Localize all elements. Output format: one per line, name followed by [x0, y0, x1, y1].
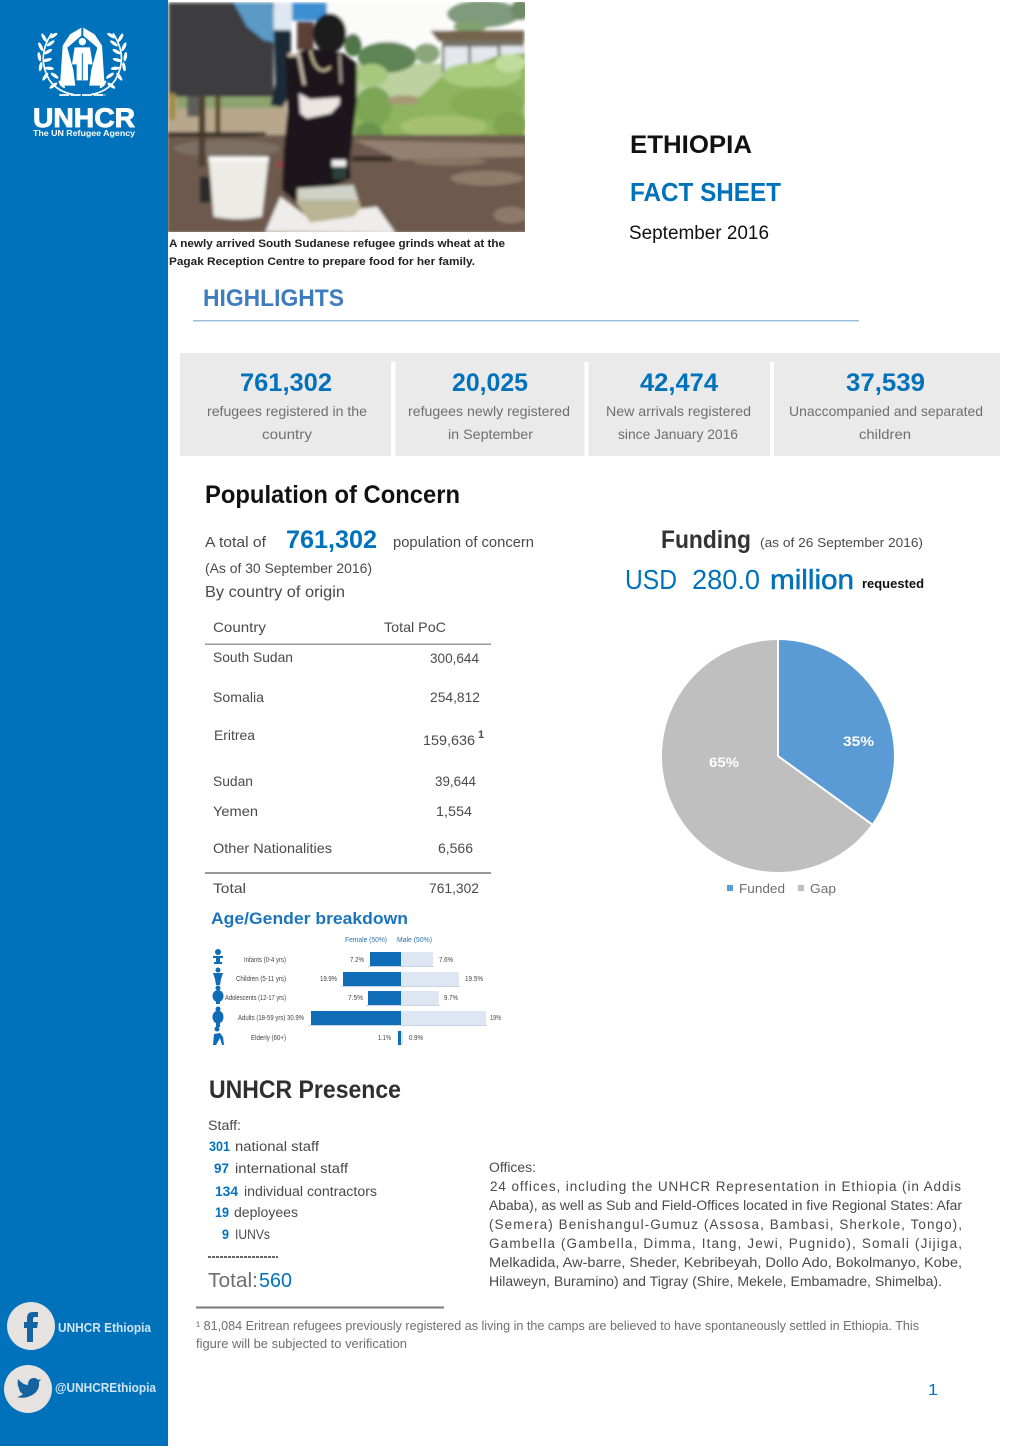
panel: highlight figures: [180, 353, 1000, 456]
text block: population total: 761,302: [286, 526, 377, 554]
pie chart: funded vs gap: 65%: [709, 754, 740, 770]
table: population by country of origin: Sudan: [213, 773, 253, 789]
icon: UNHCR logo: [33, 28, 136, 138]
text: funding requested: [625, 564, 924, 595]
text block: staff: Staff:: [208, 1118, 241, 1133]
text: facebook handle: UNHCR Ethiopia: [58, 1321, 152, 1335]
text: funding requested: requested: [862, 576, 924, 591]
panel: highlight figures: since January 2016: [618, 426, 738, 442]
chart legend: Funded: [739, 881, 785, 896]
panel: highlight figures: refugees registered in the: [207, 403, 367, 419]
table: population by country of origin: Yemen: [213, 803, 258, 819]
chart: age and gender bars: Male (50%): [397, 937, 432, 944]
chart: age and gender bars: 7.6%: [439, 957, 453, 964]
text block: staff: 9: [222, 1227, 229, 1242]
chart: age and gender bars: [212, 937, 501, 1045]
chart: age and gender bars: 19%: [490, 1015, 501, 1022]
text block: offices: Ababa), as well as Sub and Field-Offices located in five Regional States: Afar: [489, 1198, 963, 1213]
text block: staff: 560: [259, 1270, 292, 1292]
table: population by country of origin: Total PoC: [384, 619, 446, 635]
text block: staff: [208, 1118, 377, 1292]
panel: blue sidebar: [0, 0, 168, 1446]
text block: staff: deployees: [234, 1205, 298, 1220]
title block: September 2016: [629, 223, 769, 244]
panel: highlight figures: children: [859, 426, 911, 442]
panel: highlight figures: Unaccompanied and separated: [789, 403, 983, 419]
title block: [629, 131, 781, 244]
chart: age and gender bars: 7.2%: [350, 957, 364, 964]
text block: staff: international staff: [235, 1161, 348, 1176]
heading: age/gender breakdown: Age/Gender breakdown: [211, 909, 408, 928]
table: population by country of origin: 254,812: [430, 689, 480, 705]
table: population by country of origin: Eritrea: [214, 727, 255, 743]
chart: age and gender bars: Infants (0-4 yrs): [244, 957, 286, 964]
panel: highlight figures: in September: [448, 426, 533, 442]
text block: staff: 19: [215, 1205, 229, 1220]
text block: offices: [489, 1160, 963, 1289]
text block: staff: IUNVs: [235, 1227, 270, 1242]
text: twitter handle: @UNHCREthiopia: [55, 1381, 157, 1395]
chart: age and gender bars: Elderly (60+): [251, 1035, 286, 1042]
chart: age and gender bars: 7.5%: [348, 995, 363, 1002]
heading: funding: (as of 26 September 2016): [760, 536, 923, 550]
panel: highlight figures: 761,302: [240, 369, 332, 397]
pie chart: funded vs gap: 35%: [843, 733, 875, 749]
chart: age and gender bars: Adults (18-59 yrs) 30.9%: [238, 1015, 304, 1022]
footnote: figure will be subjected to verification: [196, 1337, 407, 1351]
chart: age and gender bars: 1.1%: [378, 1035, 391, 1042]
heading: UNHCR presence: UNHCR Presence: [209, 1076, 401, 1104]
text block: offices: Melkadida, Aw-barre, Sheder, Kebribeyah, Dollo Ado, Bokolmanyo, Kobe,: [489, 1255, 962, 1270]
table: population by country of origin: 1,554: [436, 803, 472, 819]
table: population by country of origin: Other Nationalities: [213, 840, 332, 856]
text block: offices: Hilaweyn, Buramino) and Tigray (Shire, Mekele, Embamadre, Shimelba).: [489, 1274, 942, 1289]
heading: funding: [661, 526, 923, 554]
chart: age and gender bars: 9.7%: [444, 995, 458, 1002]
icon: UNHCR logo: The UN Refugee Agency: [33, 129, 136, 138]
chart: age and gender bars: Adolescents (12-17 yrs): [225, 995, 286, 1002]
footnote: [196, 1306, 919, 1351]
chart: age and gender bars: Female (50%): [345, 937, 387, 944]
photo caption: [169, 238, 505, 268]
text block: offices: (Semera) Benishangul-Gumuz (Assosa, Bambasi, Sherkole, Tongo),: [489, 1217, 962, 1232]
text block: staff: Total:: [208, 1270, 258, 1292]
table: population by country of origin: 159,636: [423, 732, 475, 748]
table: population by country of origin: 6,566: [438, 840, 473, 856]
panel: highlight figures: New arrivals registered: [606, 403, 751, 419]
panel: highlight figures: 20,025: [452, 369, 528, 397]
table: population by country of origin: 39,644: [435, 773, 476, 789]
text block: population total: population of concern: [393, 535, 534, 551]
text: funding requested: USD: [625, 564, 677, 595]
text: funding requested: 280.0: [692, 564, 760, 595]
chart: age and gender bars: 19.5%: [465, 976, 483, 983]
footnote: ¹ 81,084 Eritrean refugees previously registered as living in the camps are believed to have spontaneously settled in Ethiopia. This: [196, 1319, 919, 1333]
panel: highlight figures: country: [262, 426, 312, 442]
text block: population total: A total of: [205, 535, 267, 551]
icon: facebook: [7, 1302, 55, 1350]
icon: twitter: [4, 1365, 52, 1413]
pie chart: funded vs gap: [662, 640, 894, 872]
text block: offices: Gambella (Gambella, Dimma, Itang, Jewi, Pugnido), Somali (Jijiga,: [489, 1236, 962, 1251]
heading: population of concern: Population of Concern: [205, 481, 460, 509]
page number: 1: [928, 1382, 938, 1399]
panel: highlight figures: 42,474: [640, 369, 718, 397]
table: population by country of origin: Total: [213, 880, 246, 896]
chart: age and gender bars: 19.9%: [320, 976, 337, 983]
photo: refugee grinding wheat: [167, 0, 530, 233]
text block: staff: 97: [214, 1161, 229, 1176]
text block: offices: 24 offices, including the UNHCR Representation in Ethiopia (in Addis: [490, 1179, 961, 1194]
table: population by country of origin: 761,302: [429, 880, 479, 896]
text block: staff: national staff: [235, 1139, 319, 1154]
chart legend: [727, 881, 836, 896]
chart: age and gender bars: 0.9%: [409, 1035, 423, 1042]
heading: highlights: HIGHLIGHTS: [203, 285, 344, 312]
chart legend: Gap: [810, 881, 836, 896]
panel: highlight figures: 37,539: [846, 369, 925, 397]
text: funding requested: million: [770, 564, 854, 595]
table: population by country of origin: 1: [478, 729, 484, 741]
text block: staff: 301: [209, 1139, 230, 1154]
table: population by country of origin: Somalia: [213, 689, 264, 705]
table: population by country of origin: Country: [213, 619, 266, 635]
photo caption: Pagak Reception Centre to prepare food for her family.: [169, 256, 475, 268]
icon: UNHCR logo: UNHCR: [33, 103, 135, 133]
text block: staff: individual contractors: [244, 1184, 377, 1199]
heading: funding: Funding: [661, 526, 751, 554]
text block: staff: 134: [215, 1184, 238, 1199]
title block: FACT SHEET: [630, 177, 781, 207]
panel: highlight figures: refugees newly registered: [408, 403, 570, 419]
photo caption: A newly arrived South Sudanese refugee grinds wheat at the: [169, 238, 505, 250]
table: population by country of origin: [205, 619, 491, 896]
table: population by country of origin: 300,644: [430, 650, 479, 666]
title block: ETHIOPIA: [630, 131, 752, 159]
text block: population total: [205, 526, 534, 601]
text block: offices: Offices:: [489, 1160, 536, 1175]
text block: population total: By country of origin: [205, 584, 345, 601]
chart: age and gender bars: Children (5-11 yrs): [236, 976, 286, 983]
table: population by country of origin: South Sudan: [213, 649, 293, 665]
text block: population total: (As of 30 September 2016): [205, 561, 372, 576]
